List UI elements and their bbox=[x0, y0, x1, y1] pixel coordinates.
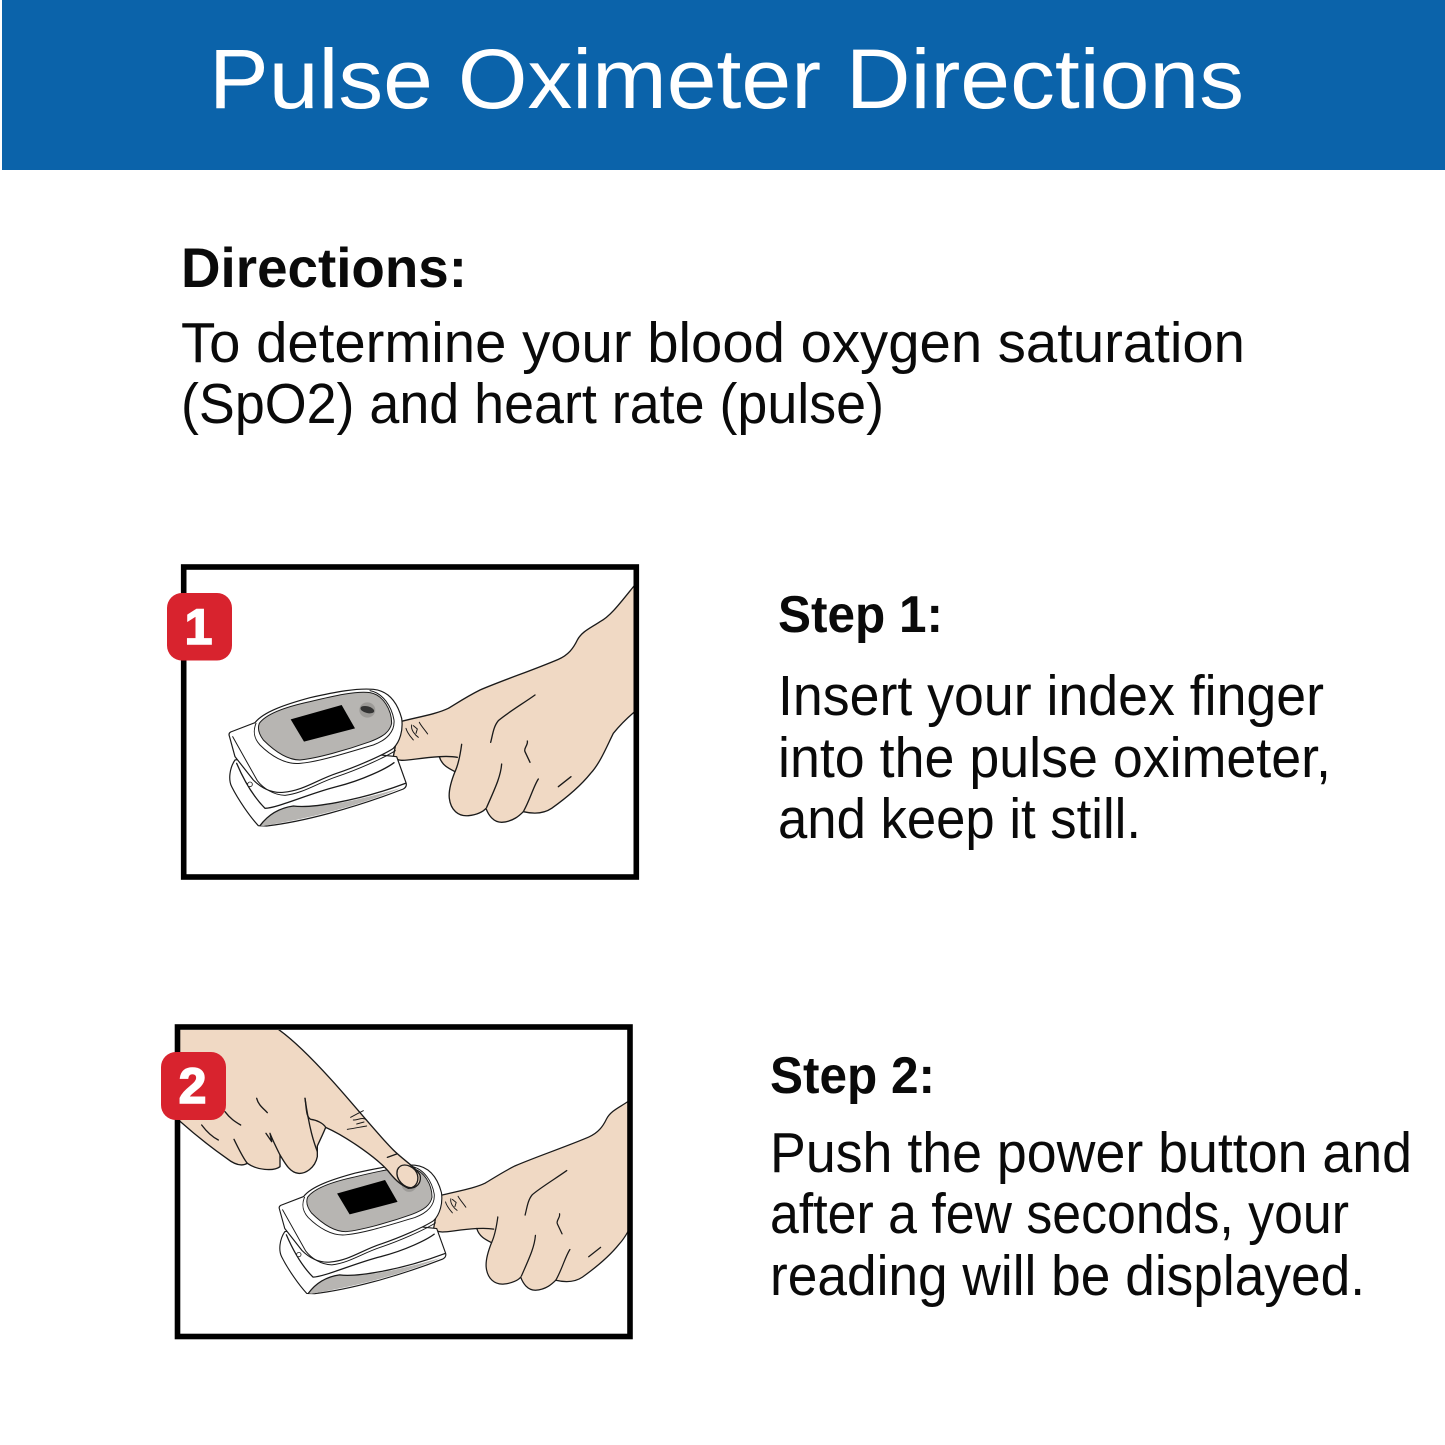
badge: number 1: 1 bbox=[185, 599, 212, 655]
directions text block bbox=[181, 236, 1245, 436]
badge: number 2 bbox=[161, 1052, 226, 1120]
pointing hand bbox=[177, 1027, 420, 1188]
step 2 text bbox=[770, 1047, 1412, 1308]
step 1 body bbox=[778, 664, 1331, 851]
step 1 text bbox=[778, 586, 1331, 851]
step 1 body: Insert your index finger bbox=[778, 664, 1324, 728]
step 2 body: after a few seconds, your bbox=[770, 1182, 1349, 1246]
badge: number 1 bbox=[167, 593, 232, 660]
panel: step 2 illustration bbox=[161, 1027, 662, 1336]
directions heading: Directions: bbox=[181, 236, 467, 299]
step 2 heading: Step 2: bbox=[770, 1047, 935, 1105]
step 2 body: Push the power button and bbox=[770, 1121, 1412, 1185]
step 1 heading: Step 1: bbox=[778, 586, 943, 644]
step 2 body bbox=[770, 1121, 1412, 1308]
directions body bbox=[181, 311, 1245, 436]
step 1 body: and keep it still. bbox=[778, 787, 1141, 851]
directions body: To determine your blood oxygen saturation bbox=[181, 311, 1245, 375]
illustration: pressing power button bbox=[177, 1027, 662, 1294]
panel: step 1 illustration bbox=[167, 567, 637, 877]
step 1 body: into the pulse oximeter, bbox=[778, 726, 1331, 790]
title: Pulse Oximeter Directions bbox=[209, 32, 1244, 126]
header banner bbox=[2, 0, 1445, 170]
illustration: hand in pulse oximeter bbox=[229, 586, 637, 826]
hand in oximeter bbox=[278, 1101, 628, 1294]
badge: number 2: 2 bbox=[179, 1058, 206, 1114]
step 2 body: reading will be displayed. bbox=[770, 1244, 1365, 1308]
directions body: (SpO2) and heart rate (pulse) bbox=[181, 372, 884, 436]
